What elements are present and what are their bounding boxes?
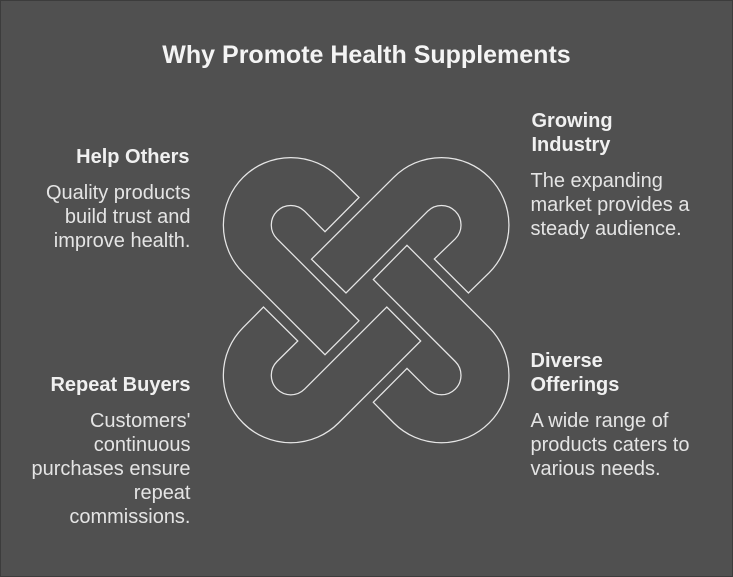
text block: growing industry: The expanding bbox=[530, 170, 663, 192]
link: bottom right bbox=[373, 245, 509, 443]
link: top left bbox=[223, 158, 359, 355]
text block: diverse offerings: products caters to bbox=[530, 434, 689, 456]
text block: repeat buyers bbox=[32, 374, 191, 528]
text block: growing industry bbox=[530, 110, 690, 240]
text block: help others: Help Others bbox=[76, 146, 190, 168]
text block: growing industry: Industry bbox=[532, 134, 611, 156]
text block: repeat buyers: continuous bbox=[94, 434, 190, 456]
title: Why Promote Health Supplements bbox=[162, 41, 571, 69]
link: bottom left bbox=[223, 307, 421, 443]
text block: diverse offerings: various needs. bbox=[530, 458, 661, 480]
diagram: interlocking links bbox=[223, 158, 509, 443]
text block: growing industry: market provides a bbox=[530, 194, 690, 216]
text block: growing industry: Growing bbox=[532, 110, 613, 132]
text block: diverse offerings bbox=[530, 350, 689, 480]
text block: diverse offerings: A wide range of bbox=[530, 410, 669, 432]
text block: help others: improve health. bbox=[54, 230, 190, 252]
text block: help others bbox=[46, 146, 190, 252]
text block: repeat buyers: commissions. bbox=[69, 506, 190, 528]
text block: repeat buyers: Repeat Buyers bbox=[50, 374, 190, 396]
text block: diverse offerings: Offerings bbox=[530, 374, 619, 396]
link: top right bbox=[312, 158, 509, 293]
text block: repeat buyers: Customers' bbox=[90, 410, 190, 432]
text block: help others: build trust and bbox=[65, 206, 190, 228]
text block: repeat buyers: repeat bbox=[134, 482, 191, 504]
text block: repeat buyers: purchases ensure bbox=[32, 458, 190, 480]
text block: diverse offerings: Diverse bbox=[530, 350, 603, 372]
text block: growing industry: steady audience. bbox=[530, 218, 682, 240]
text block: help others: Quality products bbox=[46, 182, 190, 204]
